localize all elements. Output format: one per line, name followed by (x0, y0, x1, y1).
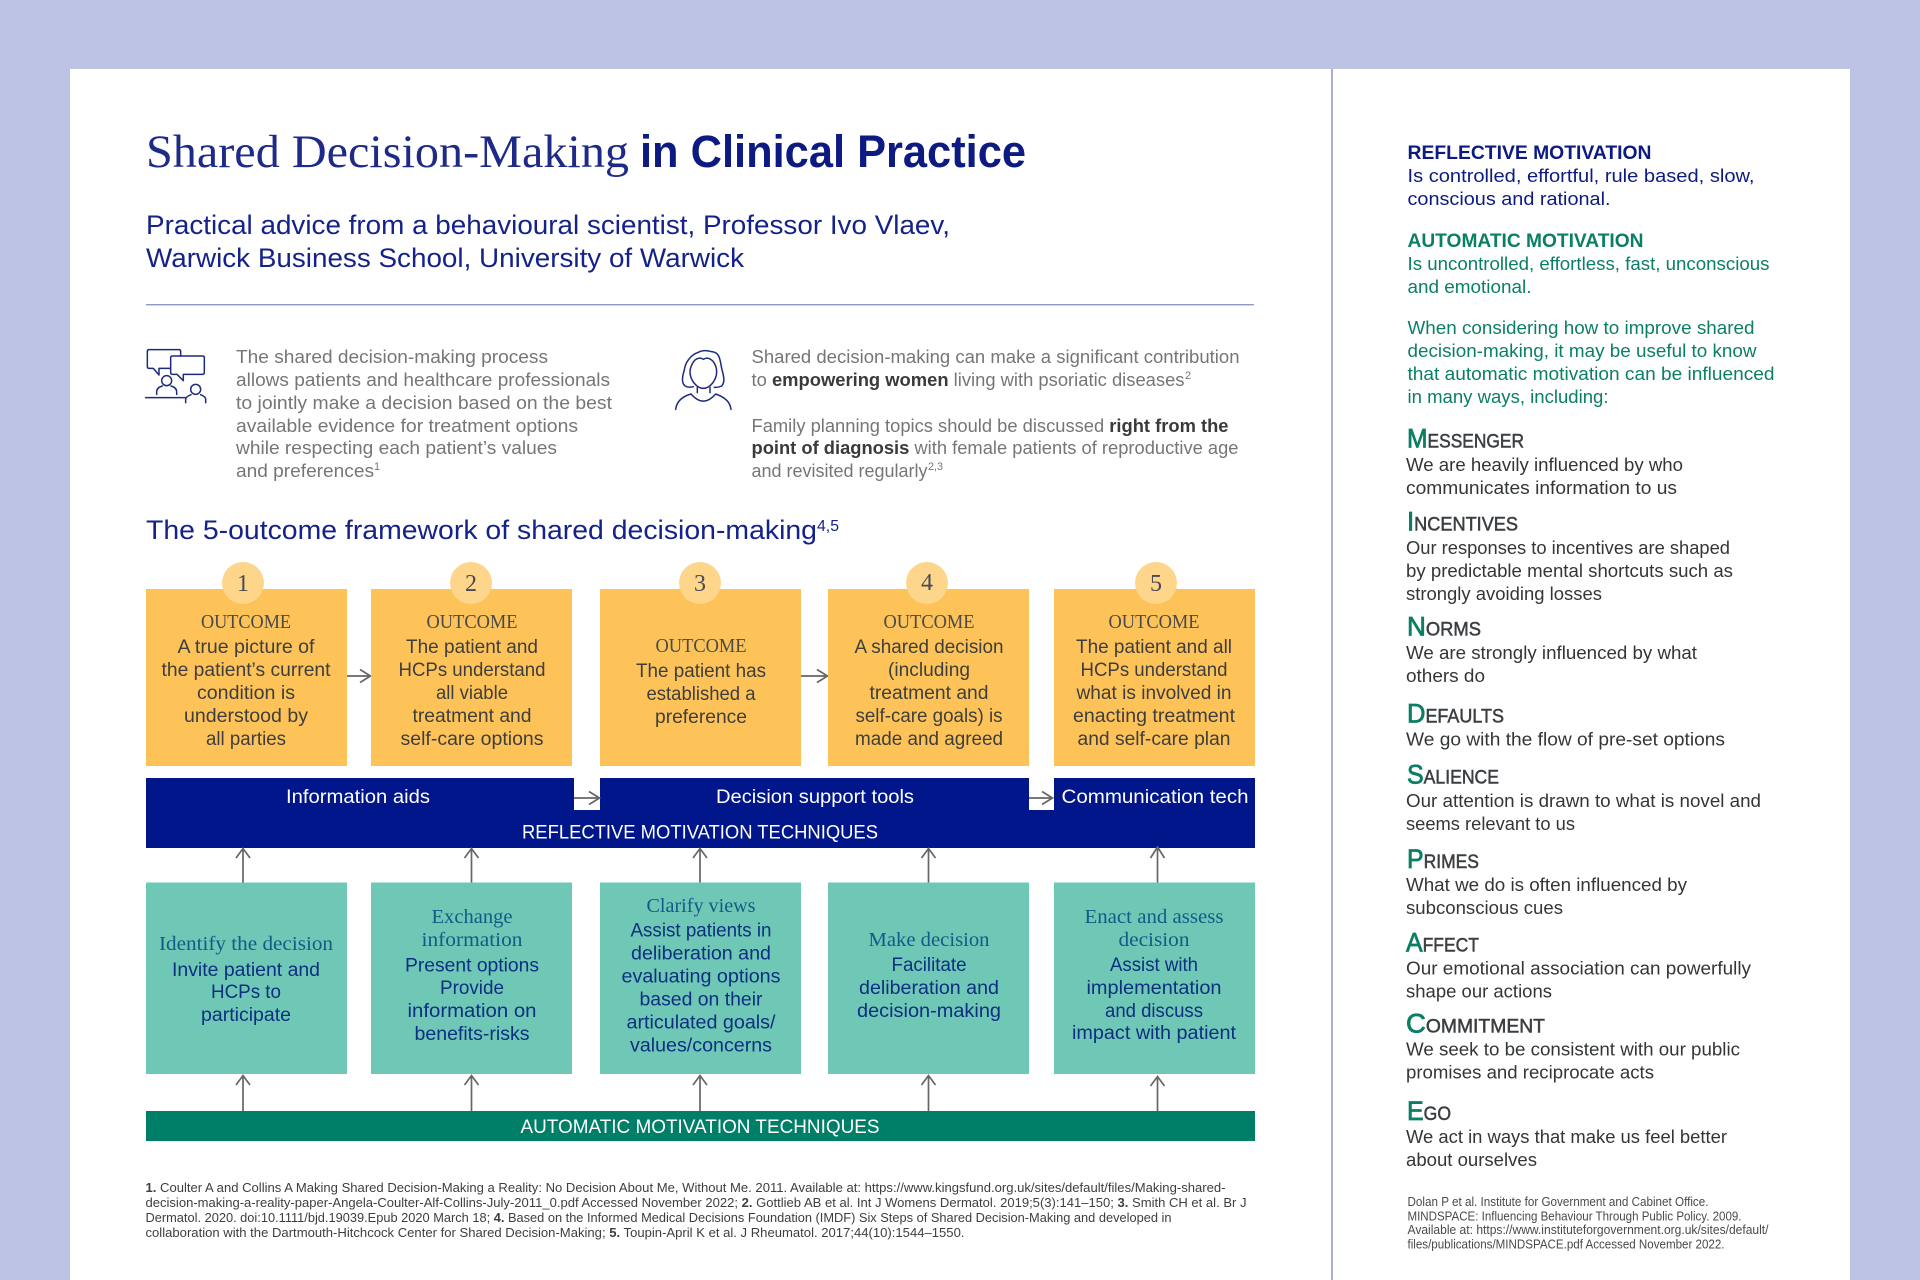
influence: ego (1406, 1096, 1727, 1170)
title (146, 126, 1026, 178)
influence: primes: What we do is often influenced by (1406, 874, 1688, 895)
step box: exchange information: Provide (440, 978, 504, 999)
step box: enact and assess decision: Assist with (1110, 955, 1198, 976)
text block: shared decision-making process: to jointly make a decision based on the best (236, 392, 612, 413)
arrow: outcome 1 to 2 (347, 670, 370, 682)
step box: clarify views: Assist patients in (630, 920, 772, 942)
footnotes: decision-making-a-reality-paper-Angela-Coulter-Alf-Collins-July-2011_0.pdf Accessed November 2022; 2. Gottlieb AB et al. Int J Womens Dermatol. 2019;5(3):141–150; 3. Smith CH et al. Br J (146, 1196, 1246, 1210)
side text: automatic motivation: AUTOMATIC MOTIVATION (1408, 230, 1644, 252)
influence: norms: others do (1406, 665, 1485, 686)
text block: shared decision-making process: 1 (374, 461, 380, 473)
subtitle: Practical advice from a behavioural scientist, Professor Ivo Vlaev, (146, 210, 950, 240)
step box: clarify views (600, 882, 801, 1074)
outcome box 1: understood by (184, 706, 308, 727)
outcome box 4: treatment and (870, 683, 988, 704)
step box: identify the decision: HCPs to (211, 982, 281, 1003)
step box: clarify views: Clarify views (646, 895, 756, 917)
side text: intro to influences: that automatic motivation can be influenced (1408, 363, 1774, 384)
icon: people in conversation (146, 350, 206, 403)
step box: clarify views: values/concerns (630, 1036, 772, 1056)
outcome box 5: HCPs understand (1080, 660, 1228, 681)
side text: intro to influences: in many ways, including: (1408, 386, 1608, 407)
outcome box 3: The patient has (636, 661, 766, 682)
text block: empowering women: to empowering women living with psoriatic diseases (752, 369, 1184, 390)
step box: enact and assess decision: decision (1118, 929, 1190, 951)
heading: framework: 4,5 (817, 518, 839, 535)
bar: automatic motivation techniques (146, 1111, 1255, 1141)
footnotes: Dermatol. 2020. doi:10.1111/bjd.19039.Epub 2020 March 18; 4. Based on the Informed Medical Decisions Foundation (IMDF) Six Steps of Shared Decision-Making and developed in (146, 1211, 1172, 1225)
outcome box 1 (146, 562, 347, 766)
influence: incentives: Our responses to incentives are shaped (1406, 537, 1730, 558)
outcome box 3: OUTCOME (656, 635, 746, 657)
title: in Clinical Practice (640, 126, 1026, 177)
arrows: up from automatic bar (236, 1076, 1164, 1111)
text block: empowering women (752, 346, 1240, 481)
side text: automatic motivation: and emotional. (1408, 276, 1532, 297)
influence: salience: seems relevant to us (1406, 813, 1575, 834)
step box: identify the decision: Invite patient and (172, 960, 320, 981)
side text: reflective motivation: REFLECTIVE MOTIVATION (1408, 142, 1652, 164)
step box: make decision: deliberation and (859, 978, 999, 999)
influence: defaults: DEFAULTS (1407, 698, 1504, 728)
influence: affect: Our emotional association can powerfully (1406, 958, 1752, 978)
influence: commitment: COMMITMENT (1406, 1008, 1545, 1038)
influence: messenger: We are heavily influenced by who (1406, 454, 1683, 475)
step box: enact and assess decision: implementation (1086, 978, 1222, 999)
influence: affect (1406, 928, 1752, 1002)
text block: empowering women: Family planning topics should be discussed right from the (752, 415, 1228, 436)
influence: primes: PRIMES (1407, 844, 1479, 874)
outcome box 5: OUTCOME (1108, 611, 1200, 633)
step box: exchange information: benefits-risks (414, 1024, 530, 1045)
influence: messenger: communicates information to us (1406, 477, 1677, 498)
side reference: files/publications/MINDSPACE.pdf Accessed November 2022. (1408, 1238, 1724, 1252)
outcome box 1: OUTCOME (201, 611, 291, 633)
text block: shared decision-making process (235, 346, 612, 481)
side reference (1408, 1195, 1769, 1252)
step box: make decision: Facilitate (892, 955, 966, 976)
influence: commitment: promises and reciprocate acts (1406, 1062, 1654, 1082)
bar: automatic motivation techniques: AUTOMATIC MOTIVATION TECHNIQUES (520, 1116, 880, 1138)
outcome box 2: OUTCOME (426, 611, 518, 633)
side text: intro to influences: When considering how to improve shared (1408, 317, 1754, 338)
influence: defaults: We go with the flow of pre-set options (1406, 728, 1725, 750)
step box: exchange information (371, 882, 572, 1074)
footnotes: 1. Coulter A and Collins A Making Shared Decision-Making a Reality: No Decision About Me, Without Me. 2011. Available at: https://www.kingsfund.org.uk/sites/default/files/Making-shared- (146, 1181, 1226, 1195)
outcome box 4: made and agreed (855, 729, 1003, 750)
influence: salience: SALIENCE (1407, 760, 1499, 790)
step box: exchange information: information on (408, 1001, 536, 1022)
influence: incentives: by predictable mental shortcuts such as (1406, 560, 1733, 581)
text block: empowering women: Shared decision-making can make a significant contribution (752, 346, 1240, 367)
step box: clarify views: deliberation and (631, 944, 771, 964)
outcome box 1: condition is (197, 683, 295, 704)
step box: clarify views: articulated goals/ (626, 1012, 776, 1034)
step box: identify the decision: Identify the decision (159, 933, 333, 955)
title: Shared Decision-Making (146, 126, 629, 178)
step box: identify the decision: participate (201, 1005, 291, 1026)
influence: ego: about ourselves (1406, 1149, 1537, 1170)
arrow: outcome 3 to 4 (801, 670, 828, 682)
influence: incentives: INCENTIVES (1407, 506, 1518, 536)
step box: exchange information: information (422, 929, 522, 951)
outcome box 2: 2 (465, 571, 477, 597)
outcome box 4: A shared decision (854, 637, 1004, 658)
influence: salience: Our attention is drawn to what is novel and (1406, 790, 1761, 811)
outcome box 5: 5 (1150, 571, 1162, 597)
step box: clarify views: evaluating options (622, 966, 780, 988)
step box: make decision: Make decision (868, 929, 990, 951)
step box: enact and assess decision: Enact and assess (1084, 906, 1224, 928)
side text: intro to influences (1408, 317, 1774, 407)
influence: norms (1406, 612, 1698, 686)
footnotes (146, 1181, 1246, 1240)
influence: primes (1406, 844, 1688, 918)
step box: enact and assess decision: and discuss (1105, 1001, 1203, 1022)
outcome box 1: all parties (206, 729, 286, 750)
arrows: up to reflective bar (236, 847, 1164, 883)
outcome box 3: preference (655, 707, 747, 728)
subtitle (146, 210, 950, 273)
outcome box 4: (including (888, 660, 970, 681)
text block: shared decision-making process: allows patients and healthcare professionals (236, 369, 610, 390)
text block: shared decision-making process: while respecting each patient’s values (235, 437, 557, 458)
step box: make decision: decision-making (857, 1001, 1001, 1022)
outcome box 4: 4 (921, 570, 933, 596)
bar: reflective motivation techniques: Communication tech (1062, 786, 1248, 808)
outcome box 2: self-care options (400, 729, 544, 750)
side text: intro to influences: decision-making, it may be useful to know (1408, 340, 1757, 361)
influence: incentives (1406, 506, 1733, 604)
side text: automatic motivation (1408, 230, 1770, 297)
step box: enact and assess decision: impact with patient (1072, 1023, 1237, 1044)
influence: primes: subconscious cues (1406, 897, 1563, 918)
step box: make decision (828, 882, 1029, 1074)
outcome box 2 (371, 562, 572, 766)
outcome box 2: treatment and (412, 706, 532, 727)
outcome box 4 (828, 562, 1029, 766)
side text: automatic motivation: Is uncontrolled, effortless, fast, unconscious (1408, 253, 1770, 274)
influence: ego: EGO (1407, 1096, 1451, 1126)
outcome box 5: enacting treatment (1073, 706, 1236, 727)
outcome box 4: OUTCOME (884, 611, 974, 633)
side text: reflective motivation: conscious and rational. (1408, 188, 1610, 209)
outcome box 1: 1 (237, 571, 249, 597)
text block: empowering women: point of diagnosis with female patients of reproductive age (752, 437, 1238, 458)
side reference: MINDSPACE: Influencing Behaviour Through Public Policy. 2009. (1408, 1210, 1742, 1224)
influence: commitment (1406, 1008, 1740, 1082)
step box: clarify views: based on their (640, 990, 763, 1010)
influence: messenger: MESSENGER (1407, 424, 1524, 454)
influence: commitment: We seek to be consistent with our public (1406, 1038, 1740, 1060)
influence: affect: AFFECT (1406, 928, 1479, 958)
outcome box 3: 3 (694, 571, 706, 597)
outcome box 5 (1054, 562, 1255, 766)
step box: exchange information: Exchange (432, 906, 512, 928)
influence: incentives: strongly avoiding losses (1406, 583, 1602, 604)
text block: shared decision-making process: and preferences (236, 460, 374, 481)
arrow: decision support tools to communication tech (1029, 792, 1052, 804)
outcome box 3 (600, 562, 801, 766)
influence: defaults (1406, 698, 1725, 750)
bar: reflective motivation techniques: Decision support tools (716, 786, 914, 808)
outcome box 4: self-care goals) is (856, 706, 1002, 727)
outcome box 2: all viable (436, 683, 508, 704)
influence: norms: We are strongly influenced by what (1406, 642, 1698, 663)
side reference: Available at: https://www.instituteforgovernment.org.uk/sites/default/ (1408, 1223, 1769, 1237)
outcome box 5: what is involved in (1076, 683, 1232, 704)
influence: messenger (1406, 424, 1683, 498)
influence: affect: shape our actions (1406, 980, 1552, 1002)
outcome box 1: the patient’s current (162, 660, 331, 681)
bar: reflective motivation techniques (146, 778, 1255, 848)
text block: shared decision-making process: available evidence for treatment options (236, 415, 578, 436)
arrow: information aids to decision support tools (574, 792, 600, 804)
influence: salience (1406, 760, 1761, 834)
subtitle: Warwick Business School, University of Warwick (146, 243, 745, 273)
bar: reflective motivation techniques: REFLECTIVE MOTIVATION TECHNIQUES (522, 822, 878, 844)
influence: ego: We act in ways that make us feel better (1406, 1126, 1727, 1147)
side text: reflective motivation: Is controlled, effortful, rule based, slow, (1408, 165, 1754, 186)
side text: reflective motivation (1408, 142, 1754, 209)
text block: empowering women: 2,3 (928, 461, 943, 473)
outcome box 3: established a (646, 684, 756, 705)
influence: norms: NORMS (1407, 612, 1481, 642)
outcome box 5: and self-care plan (1078, 729, 1230, 750)
text block: shared decision-making process: The shared decision-making process (236, 346, 548, 367)
heading: framework: The 5-outcome framework of shared decision-making (146, 515, 817, 545)
footnotes: collaboration with the Dartmouth-Hitchcock Center for Shared Decision-Making; 5. Toupin-April K et al. J Rheumatol. 2017;44(10):1544–1550. (146, 1226, 964, 1240)
outcome box 5: The patient and all (1076, 637, 1232, 658)
side reference: Dolan P et al. Institute for Government and Cabinet Office. (1408, 1195, 1708, 1209)
text block: empowering women: and revisited regularly (752, 460, 928, 481)
step box: exchange information: Present options (405, 956, 539, 976)
outcome box 2: HCPs understand (398, 660, 546, 681)
icon: woman (676, 351, 731, 409)
bar: reflective motivation techniques: Information aids (286, 786, 430, 808)
step box: enact and assess decision (1054, 882, 1255, 1074)
text block: empowering women: 2 (1185, 370, 1191, 382)
step box: identify the decision (146, 882, 347, 1074)
outcome box 2: The patient and (406, 637, 538, 658)
outcome box 1: A true picture of (178, 637, 315, 658)
